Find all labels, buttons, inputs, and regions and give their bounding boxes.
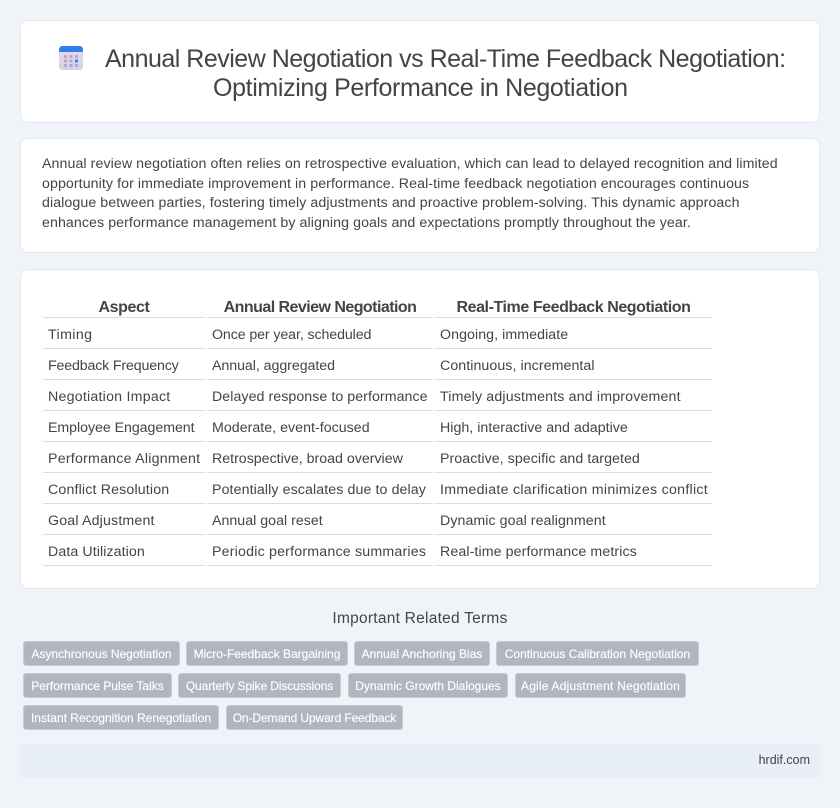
row: Conflict Resolution: Potentially escalates due to delay [212,482,426,498]
row: Conflict Resolution [48,482,708,498]
panel: comparison table card [20,269,820,589]
tag [354,641,490,666]
row: Goal Adjustment: Dynamic goal realignment [440,513,606,529]
row: Conflict Resolution: Immediate clarification minimizes conflict [440,482,708,498]
tag: Performance Pulse Talks [31,679,164,693]
row: Negotiation Impact: Timely adjustments and improvement [440,389,681,405]
table header: Annual Review Negotiation: Annual Review Negotiation [224,299,416,316]
tag [23,705,219,730]
panel: title card [20,20,820,123]
tag [178,673,341,698]
row: Timing: Timing [48,327,92,343]
row: Timing: Ongoing, immediate [440,327,568,343]
row: Data Utilization: Periodic performance summaries [212,544,426,560]
row: Goal Adjustment: Annual goal reset [212,513,323,529]
row: Employee Engagement [48,420,628,436]
row: Goal Adjustment [48,513,606,529]
row: Feedback Frequency [48,358,595,374]
row: Employee Engagement: High, interactive and adaptive [440,420,628,436]
row: Employee Engagement: Moderate, event-focused [212,420,370,436]
row: Performance Alignment: Proactive, specific and targeted [440,451,640,467]
row: Performance Alignment: Retrospective, broad overview [212,451,403,467]
intro text: Annual review negotiation often relies on retrospective evaluation, which can lead to delayed recognition and limited [42,156,778,172]
intro text: opportunity for immediate improvement in performance. Real-time feedback negotiation encourages continuous [42,176,749,192]
title: Optimizing Performance in Negotiation [213,74,628,102]
tag: On-Demand Upward Feedback [233,711,396,725]
row: Feedback Frequency: Continuous, incremental [440,358,595,374]
tag [515,673,686,698]
footer bar [20,744,820,778]
intro text: dialogue between parties, fostering timely adjustments and proactive problem-solving. This dynamic approach [42,195,740,211]
heading: Important Related Terms: Important Related Terms [332,610,508,627]
row: Performance Alignment [48,451,640,467]
tag [23,641,180,666]
tag [186,641,348,666]
tag: Instant Recognition Renegotiation [31,711,211,725]
row: Data Utilization: Data Utilization [48,544,145,560]
row: Employee Engagement: Employee Engagement [48,420,195,436]
row: Timing [48,327,568,343]
row: Feedback Frequency: Feedback Frequency [48,358,179,374]
intro text: enhances performance management by aligning goals and expectations promptly throughout the year. [42,214,691,230]
panel: intro text card [20,138,820,253]
row: Performance Alignment: Performance Alignment [48,451,200,467]
title [105,45,786,102]
tag: Annual Anchoring Bias [362,647,482,661]
row: Conflict Resolution: Conflict Resolution [48,482,169,498]
tag: Agile Adjustment Negotiation [521,679,680,693]
row: Data Utilization [48,544,637,560]
tag: Asynchronous Negotiation [31,647,172,661]
tag: Micro-Feedback Bargaining [194,647,340,661]
tag [226,705,403,730]
tag [348,673,508,698]
table header: Real-Time Feedback Negotiation: Real-Time Feedback Negotiation [456,299,690,316]
tag [23,673,172,698]
intro text [42,156,778,230]
row: Negotiation Impact [48,389,681,405]
tag: Dynamic Growth Dialogues [355,679,501,693]
row: Negotiation Impact: Negotiation Impact [48,389,170,405]
row: Goal Adjustment: Goal Adjustment [48,513,155,529]
footer: source: hrdif.com [759,753,810,767]
row: Feedback Frequency: Annual, aggregated [212,358,335,374]
icon: calendar [59,46,83,70]
row: Timing: Once per year, scheduled [212,327,371,343]
row: Negotiation Impact: Delayed response to performance [212,389,428,405]
tag: Continuous Calibration Negotiation [505,647,690,661]
row: Data Utilization: Real-time performance metrics [440,544,637,560]
table header: Aspect: Aspect [99,299,149,316]
title: Annual Review Negotiation vs Real-Time Feedback Negotiation: [105,45,786,73]
tag group: related terms [23,641,699,730]
tag [496,641,699,666]
tag: Quarterly Spike Discussions [186,679,333,693]
